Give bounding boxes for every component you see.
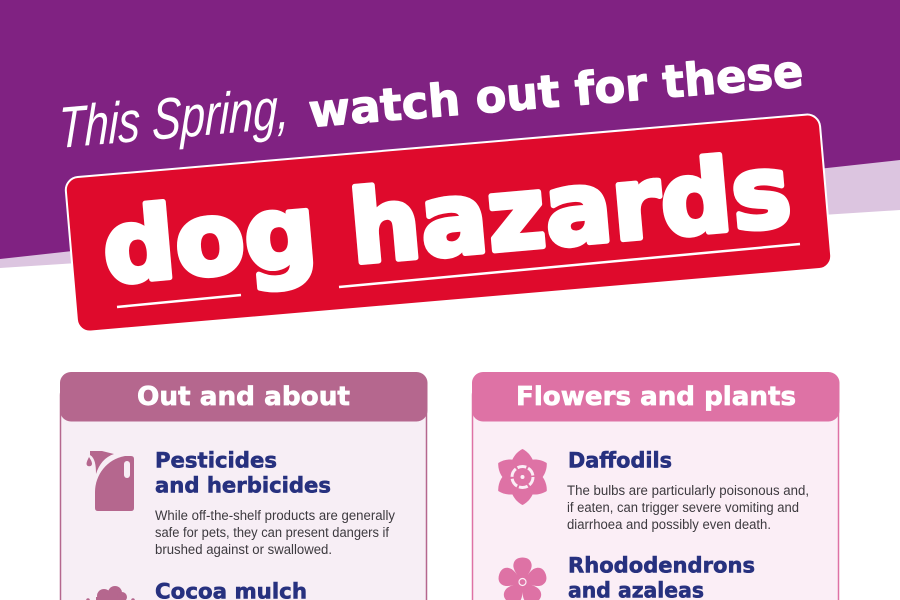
underline: dog [117,295,241,307]
subtitle script: This Spring,: This Spring, [58,76,290,161]
panel heading: Out and about [137,382,350,412]
red banner box [65,113,832,333]
item heading: rhododendrons and azaleas: Rhododendrons [568,554,755,578]
icon: spray bottle [86,451,134,511]
panel header bar [60,372,428,422]
panel heading: Flowers and plants [516,382,796,412]
title word: hazards: hazards [345,132,795,287]
item text: pesticides: safe for pets, they can present dangers if [155,525,389,540]
panel header bar [472,372,840,422]
item heading: daffodils: Daffodils [568,448,672,474]
item text: daffodils: The bulbs are particularly poisonous and, [567,483,809,498]
purple header background [0,0,900,259]
title word: dog: dog [98,172,321,307]
item heading: pesticides and herbicides: Pesticides [155,448,277,474]
title banner: dog hazards [65,113,832,333]
icon: daffodil [492,449,553,505]
panel: out and about [60,372,428,600]
lavender background band [0,150,900,268]
item heading: pesticides and herbicides: and herbicides [155,474,331,498]
panel body [60,385,426,600]
panel body [472,385,838,600]
item text: pesticides: brushed against or swallowed. [155,542,332,557]
icon: rhododendron [496,558,549,600]
panel: flowers and plants [472,372,840,600]
underline: hazards [339,244,800,287]
item text: pesticides: While off-the-shelf products are generally [155,508,395,523]
item text: daffodils: diarrhoea and possibly even death. [567,517,771,532]
item text: daffodils: if eaten, can trigger severe vomiting and [567,500,799,515]
icon: mulch pile [86,586,135,600]
subtitle: watch out for these: watch out for these [307,44,805,138]
